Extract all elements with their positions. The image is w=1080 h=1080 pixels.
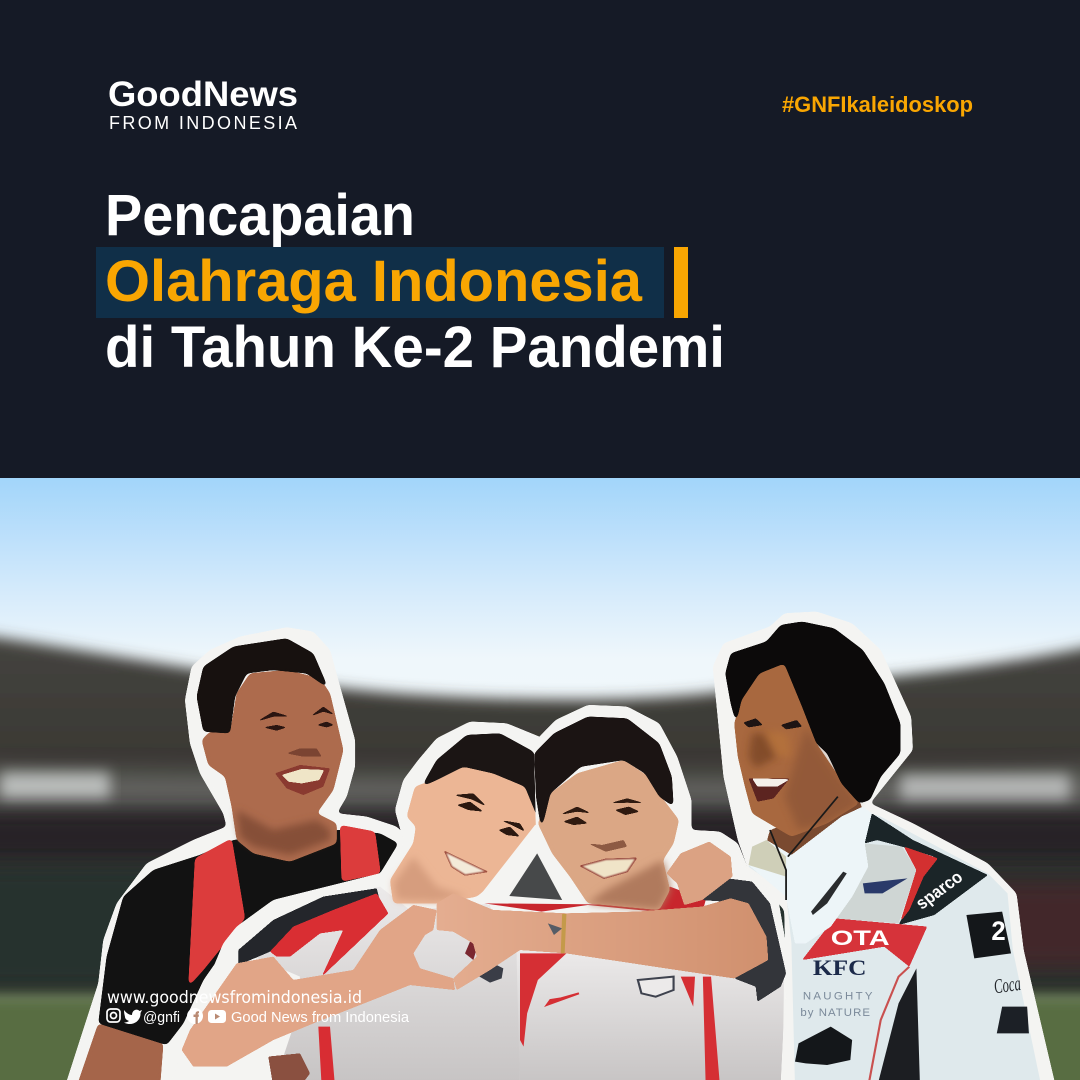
stadium photo background	[0, 478, 1080, 1080]
title highlight box	[96, 247, 664, 318]
Apriyani nose shadow	[588, 840, 627, 852]
driver earphone wire	[770, 797, 838, 900]
Greysia sticker outline	[170, 722, 567, 1080]
weightlifter eyes and brows	[257, 707, 335, 731]
Apriyani hair	[534, 717, 674, 830]
person: badminton player Apriyani	[437, 705, 791, 1080]
person: badminton player Greysia	[170, 722, 567, 1080]
driver red seam	[868, 967, 909, 1080]
icon: youtube	[208, 1010, 226, 1023]
driver suit logos: Coca	[992, 972, 1022, 998]
Greysia smile	[445, 852, 487, 875]
Greysia eyes and brows	[453, 793, 525, 837]
driver suit logos: NAUGHTY	[803, 991, 873, 1002]
weightlifter nose shadow	[287, 748, 322, 757]
wrist tattoo and bracelet	[548, 923, 562, 935]
gap between players showing background	[509, 853, 562, 900]
person: weightlifter	[65, 627, 407, 1080]
driver sticker outline	[713, 612, 1056, 1080]
driver nose shadow	[749, 733, 777, 768]
weightlifter black shirt	[98, 830, 398, 1045]
logo: GoodNews from Indonesia: FROM INDONESIA	[109, 113, 297, 133]
footer website and social handles	[107, 988, 410, 1026]
driver Toyota chest banner	[802, 918, 927, 967]
Apriyani red jersey trim	[520, 953, 720, 1080]
driver white collar	[749, 807, 872, 943]
weightlifter red straps	[188, 838, 245, 987]
Greysia black shoulder stripe	[238, 888, 380, 965]
title: di Tahun Ke-2 Pandemi	[105, 315, 725, 380]
driver racing suit	[749, 810, 1041, 1080]
Greysia white jersey	[238, 887, 560, 1080]
Greysia red shoulder panel	[270, 893, 388, 977]
driver suit logos	[795, 867, 1029, 1065]
weightlifter hair	[197, 638, 328, 733]
driver suit logos: KFC	[813, 956, 866, 980]
driver chest shading	[834, 843, 916, 923]
Greysia jersey emblems	[477, 963, 503, 983]
footer website and social handles: Good News from Indonesia	[231, 1010, 410, 1026]
Apriyani red collar	[484, 887, 706, 913]
driver suit logos: 2	[991, 916, 1006, 946]
weightlifter neck and face	[202, 670, 343, 862]
driver suit logos: by NATURE	[800, 1007, 870, 1019]
Apriyani dark sleeve	[702, 878, 786, 1002]
driver suit logos: sparco	[912, 867, 967, 913]
weightlifter hand behind Greysia	[268, 1053, 310, 1080]
icon: twitter	[124, 1010, 142, 1024]
logo: GoodNews from Indonesia	[108, 75, 298, 133]
icon: instagram	[107, 1009, 120, 1022]
driver suit logos: OTA	[831, 926, 890, 950]
driver face	[734, 663, 859, 837]
title: Olahraga Indonesia	[105, 249, 643, 314]
jersey emblem	[638, 977, 674, 997]
driver red stripe	[900, 847, 938, 922]
Apriyani jersey	[516, 950, 784, 1080]
person: racing driver	[713, 612, 1056, 1080]
Greysia hand on shoulder	[666, 842, 732, 905]
driver cheek highlight	[763, 730, 791, 757]
hashtag: #GNFIkaleidoskop	[782, 92, 973, 117]
Apriyani sticker outline	[488, 705, 791, 1080]
driver neck	[766, 800, 865, 858]
Greysia arm and hand forming half heart	[182, 905, 455, 1067]
weightlifter sticker outline	[65, 627, 407, 1080]
title: Pencapaian	[105, 183, 415, 248]
driver dark side panel	[877, 968, 920, 1080]
white outline around the gap	[479, 823, 570, 905]
driver dark shoulder panel	[865, 813, 988, 925]
Apriyani forearm and hand	[437, 893, 768, 990]
driver Le Mans badge	[966, 912, 1011, 958]
driver hair	[725, 622, 900, 803]
header panel	[0, 0, 1080, 478]
title	[96, 183, 725, 380]
weightlifter smile	[275, 765, 330, 795]
footer website and social handles: www.goodnewsfromindonesia.id	[107, 988, 362, 1008]
footer website and social handles: @gnfi	[143, 1010, 180, 1026]
Apriyani neck and face	[538, 760, 679, 910]
Greysia jersey red trim	[318, 950, 535, 1080]
logo: GoodNews from Indonesia: GoodNews	[108, 75, 298, 114]
driver smile	[749, 778, 790, 802]
driver eyes	[743, 718, 802, 729]
icon: facebook	[187, 1008, 203, 1024]
title cursor bar	[674, 247, 688, 318]
Apriyani smile	[581, 858, 636, 878]
Apriyani eyes and brows	[559, 798, 645, 825]
Greysia neck and face	[390, 767, 540, 903]
weightlifter shoulder	[77, 1023, 163, 1080]
Greysia hair	[422, 733, 547, 823]
